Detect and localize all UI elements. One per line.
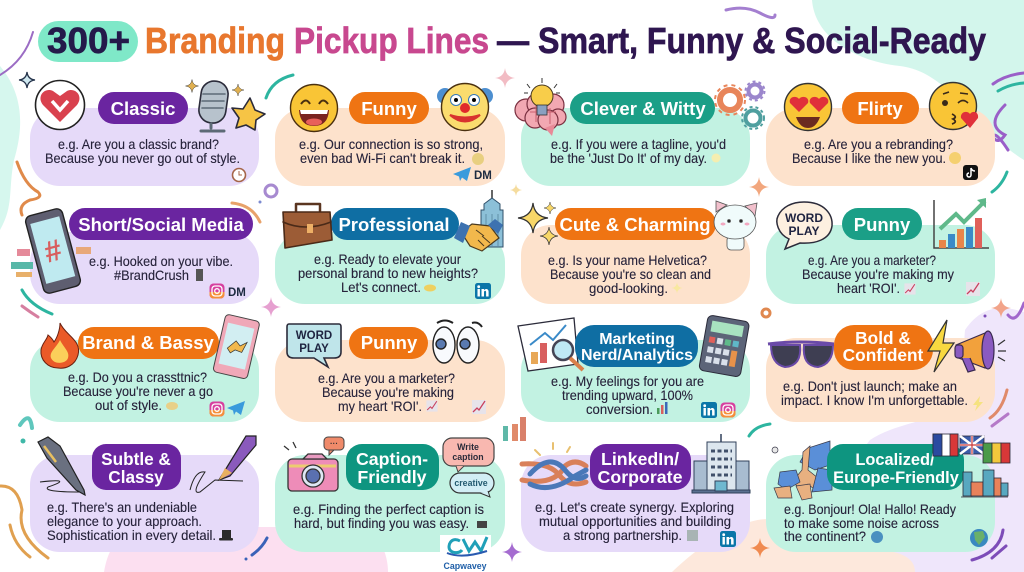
icon: telegram	[227, 401, 245, 415]
card: Short/Social Media	[11, 207, 259, 304]
icon: word play bubble: PLAY	[789, 224, 819, 238]
text: short line: #BrandCrush	[114, 268, 189, 283]
icon: laughing emoji	[472, 153, 484, 165]
card: Flirty	[766, 82, 995, 186]
icon: europe map	[772, 441, 832, 500]
text: subtle line	[47, 500, 216, 543]
pill: Punny	[842, 208, 922, 240]
pill: LinkedIn/Corporate: Corporate	[598, 467, 683, 487]
text: funny line: even bad Wi-Fi can't break it.	[300, 151, 465, 166]
card: Punny (chart)	[766, 198, 995, 304]
icon: megaphone	[955, 331, 1006, 372]
icon: write caption bubble	[443, 438, 494, 472]
icon: star	[232, 98, 265, 130]
pill: Subtle & Classy: Classy	[108, 467, 164, 487]
icon: knot	[522, 443, 586, 488]
icon: linkedin	[701, 402, 717, 418]
icon: sparkles	[186, 80, 244, 96]
icon: skyscraper	[481, 190, 503, 247]
pill: Subtle & Classy	[92, 444, 181, 490]
pill: Punny	[349, 327, 428, 359]
pill: Brand & Bassy	[78, 327, 219, 359]
icon: kissing face	[930, 82, 978, 130]
text: caption line	[293, 502, 484, 531]
bar-chart accent between cards	[503, 417, 526, 441]
icon: instagram	[210, 284, 224, 298]
text: marketing line	[551, 374, 704, 417]
pill: Marketing Nerd/Analytics: Marketing	[599, 331, 675, 348]
title	[38, 20, 986, 62]
pill: Flirty	[842, 92, 919, 124]
icon: chat bubble: ···	[330, 439, 338, 448]
icon: linkedin	[720, 531, 736, 547]
pill: LinkedIn/Corporate: LinkedIn/	[601, 449, 679, 469]
pill: Funny	[349, 92, 429, 124]
card: Classic	[19, 72, 265, 186]
icon: instagram	[720, 402, 736, 418]
pill: Clever & Witty	[570, 92, 715, 124]
text: eyes line: my heart 'ROI'.	[338, 399, 422, 414]
icon: flame	[41, 323, 79, 368]
text: bassy line: out of style.	[95, 398, 162, 413]
pill: Subtle & Classy: Subtle &	[101, 449, 171, 469]
text: linkedin line: e.g. Let's create synergy. Exploring	[535, 500, 734, 515]
text: caption line: hard, but finding you was easy.	[294, 516, 469, 531]
icon: sunglasses	[768, 342, 834, 367]
icon: chart emoji	[426, 400, 438, 412]
card: Funny	[275, 84, 505, 186]
pill: Funny: Funny	[361, 98, 417, 119]
text: localized line: the continent?	[784, 529, 866, 544]
text: caption line: e.g. Finding the perfect caption is	[293, 502, 484, 517]
icon: creative bubble	[450, 473, 494, 497]
text: professional line: e.g. Ready to elevate your	[314, 252, 461, 267]
card: Caption-Friendly	[275, 437, 505, 572]
text: cute line	[548, 253, 711, 296]
icon: grinning face	[290, 84, 338, 132]
card: Brand & Bassy	[30, 314, 260, 422]
pill: Marketing Nerd/Analytics	[575, 325, 698, 367]
pill: Bold & Confident: Confident	[843, 345, 924, 365]
pill: Short/Social Media	[69, 208, 253, 240]
text: classic line: e.g. Are you a classic brand?	[58, 137, 219, 152]
icon: small camera	[477, 521, 487, 528]
icon: small sparkle	[672, 282, 682, 294]
icon: phone with hashtag	[24, 207, 82, 295]
pill: Flirty: Flirty	[857, 98, 903, 119]
icon: tiktok	[963, 165, 978, 180]
pill: Caption-Friendly: Caption-	[356, 449, 428, 469]
icon: clown face	[437, 84, 493, 130]
pill: Classic	[98, 92, 188, 124]
text: short line	[89, 254, 233, 283]
text: subtle line: elegance to your approach.	[47, 514, 202, 529]
card: Punny (eyes)	[275, 320, 505, 422]
text: subtle line: Sophistication in every detail.	[47, 528, 216, 543]
icon: top hat	[219, 530, 233, 540]
text: bassy line: Because you're never a go	[63, 384, 213, 399]
text: professional line: Let's connect.	[341, 280, 421, 295]
icon: kitten	[714, 201, 757, 250]
title badge: 300+	[38, 21, 138, 62]
text: punny line: e.g. Are you a marketer?	[808, 253, 936, 268]
icon: briefcase	[283, 204, 332, 248]
pill: LinkedIn/Corporate	[590, 444, 691, 490]
text: localized line: to make some noise across	[784, 516, 939, 531]
icon: lightning	[928, 320, 954, 372]
text: marketing line: trending upward, 100%	[562, 388, 693, 403]
card: Marketing Nerd/Analytics	[518, 315, 750, 422]
icon: small bars	[657, 402, 668, 414]
text: flirty line	[792, 137, 953, 166]
icon: write caption bubble: Write	[457, 442, 479, 452]
icon: flags	[933, 434, 1010, 463]
title: Pickup Lines	[294, 20, 489, 61]
icon: small bulb	[712, 154, 720, 162]
icon: small building	[687, 530, 698, 541]
icon: instagram	[210, 402, 224, 416]
text: classic line: Because you never go out of style.	[45, 151, 240, 166]
pill: Localized/Europe-Friendly	[827, 444, 964, 490]
icon: small handshake	[424, 284, 436, 292]
text: short line: e.g. Hooked on your vibe.	[89, 254, 233, 269]
icon: write caption bubble: caption	[452, 452, 484, 462]
pill: Localized/Europe-Friendly: Europe-Friendly	[833, 469, 960, 487]
pill: Localized/Europe-Friendly: Localized/	[855, 451, 935, 469]
text: eyes line: Because you're making	[322, 385, 454, 400]
icon: growth chart	[934, 198, 989, 248]
card: LinkedIn/Corporate	[521, 434, 750, 552]
pill: Short/Social Media: Short/Social Media	[78, 214, 244, 235]
text: professional line	[298, 252, 478, 295]
text: clever line: e.g. If you were a tagline, you'd	[551, 137, 726, 152]
icon: small globe	[871, 531, 883, 543]
text: bassy line	[63, 370, 213, 413]
text: subtle line: e.g. There's an undeniable	[47, 500, 197, 515]
text: localized line: e.g. Bonjour! Ola! Hallo! Ready	[784, 502, 956, 517]
icon: eyes	[433, 320, 482, 363]
text: funny line	[299, 137, 483, 166]
icon: office building	[692, 434, 750, 493]
text: cute line: e.g. Is your name Helvetica?	[548, 253, 707, 268]
text: flirty line: Because I like the new you.	[792, 151, 946, 166]
icon: alarm clock	[232, 168, 246, 182]
icon: chat bubble	[324, 437, 344, 455]
icon: city	[961, 470, 1008, 497]
icon: gold sparkles	[518, 202, 558, 245]
pill: Cute & Charming: Cute & Charming	[559, 214, 711, 235]
icon: wink emoji	[949, 152, 961, 164]
pill: Professional	[331, 208, 459, 240]
icon: chart emoji	[966, 282, 980, 296]
title: Branding	[145, 20, 285, 61]
icon: ballpoint pen	[38, 437, 85, 495]
text: punny line	[802, 253, 954, 296]
text: cute line: good-looking.	[589, 281, 668, 296]
icon: creative bubble: creative	[454, 478, 488, 488]
pill: Caption-Friendly: Friendly	[357, 467, 427, 487]
text: classic line	[45, 137, 240, 166]
text: funny line: e.g. Our connection is so strong,	[299, 137, 483, 152]
text: eyes line: e.g. Are you a marketer?	[318, 371, 455, 386]
icon: linkedin	[475, 283, 491, 299]
icon: microphone	[197, 79, 230, 131]
icon: phone emoji	[196, 269, 203, 281]
text: bold line	[781, 379, 968, 408]
text: bold line: impact. I know I'm unforgettable.	[781, 393, 968, 408]
logo: Capwavey: Capwavey	[443, 561, 487, 571]
text: bassy line: e.g. Do you a crassttnic?	[68, 370, 207, 385]
icon: small emoji	[166, 402, 178, 410]
text: bold line: e.g. Don't just launch; make an	[783, 379, 957, 394]
pill: Marketing Nerd/Analytics: Nerd/Analytics	[581, 347, 693, 364]
pill: Brand & Bassy: Brand & Bassy	[82, 332, 215, 353]
icon: chart with magnifier	[518, 318, 583, 371]
icon: globe	[970, 529, 988, 547]
icon: bars	[11, 247, 91, 277]
icon: handshake	[454, 219, 503, 251]
icon: heart eyes face	[784, 84, 832, 130]
pill: Caption-Friendly	[346, 444, 439, 490]
icon: phone	[213, 314, 260, 379]
icon: calculator	[699, 315, 750, 377]
text: punny line: Because you're making my	[802, 267, 954, 282]
text: punny line: heart 'ROI'.	[837, 281, 900, 296]
text: clever line: be the 'Just Do It' of my day.	[550, 151, 707, 166]
icon: word play box	[287, 324, 341, 367]
text: localized line	[784, 502, 956, 544]
title: 300+	[47, 20, 130, 61]
card: Clever & Witty	[515, 78, 764, 186]
icon: camera	[284, 442, 338, 491]
pill: Cute & Charming	[555, 208, 716, 240]
pill: Bold & Confident	[834, 325, 933, 370]
icon: gears	[715, 82, 764, 129]
icon: sparkle dark	[19, 72, 35, 88]
icon: word play bubble	[777, 202, 832, 249]
text: linkedin line: mutual opportunities and building	[539, 514, 731, 529]
icon: brain and bulb	[515, 78, 566, 136]
text: eyes line	[318, 371, 455, 414]
pill: Professional: Professional	[338, 214, 450, 235]
card: Subtle & Classy	[30, 436, 259, 552]
icon: chart emoji	[904, 283, 916, 295]
text: clever line	[550, 137, 726, 166]
text: marketing line: e.g. My feelings for you are	[551, 374, 704, 389]
pill: Clever & Witty: Clever & Witty	[580, 98, 706, 119]
text: DM: DM	[474, 170, 492, 182]
icon: chart emoji	[472, 400, 486, 414]
text: linkedin line: a strong partnership.	[563, 528, 682, 543]
text: professional line: personal brand to new heights?	[298, 266, 478, 281]
icon: fountain pen and signature	[190, 436, 256, 492]
pill: Classic: Classic	[111, 98, 175, 119]
text: cute line: Because you're so clean and	[550, 267, 711, 282]
text: marketing line: conversion.	[586, 402, 653, 417]
card: Cute & Charming	[518, 201, 757, 304]
pill: Punny: Punny	[854, 214, 911, 235]
icon: small bolt	[973, 396, 983, 411]
icon: telegram	[453, 167, 471, 181]
card: Bold & Confident	[766, 320, 1006, 422]
text: DM: DM	[228, 287, 246, 299]
text: linkedin line	[535, 500, 734, 543]
pill: Bold & Confident: Bold &	[855, 328, 911, 348]
card: Professional	[275, 190, 505, 304]
icon: phone with hashtag: #	[41, 233, 66, 270]
pill: Punny: Punny	[361, 332, 418, 353]
logo: Capwavey	[440, 535, 491, 572]
icon: word play bubble: WORD	[785, 211, 823, 225]
text: flirty line: e.g. Are you a rebranding?	[804, 137, 953, 152]
icon: heart badge	[36, 80, 84, 130]
card: Localized/Europe-Friendly	[766, 434, 1010, 552]
